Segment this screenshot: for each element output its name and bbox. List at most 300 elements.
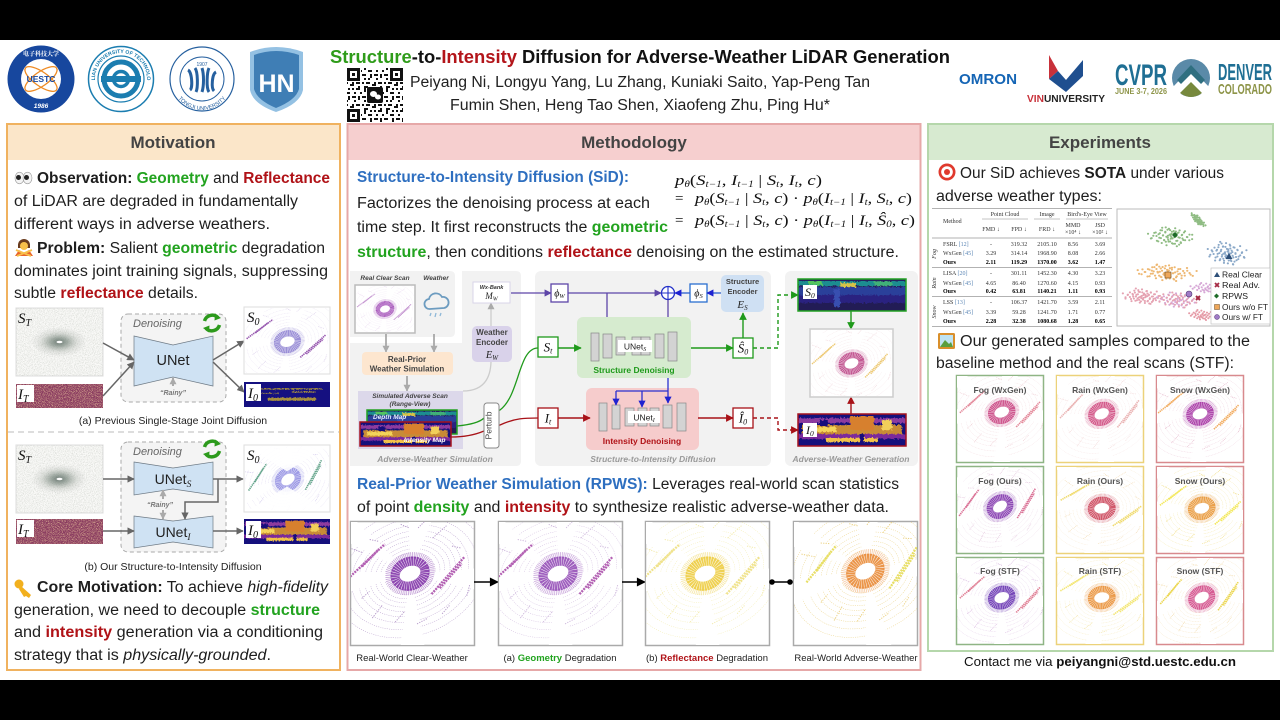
results table: 8.08	[1068, 251, 1078, 257]
generated I_0: 0	[810, 429, 814, 438]
UNet_S: S	[187, 480, 192, 490]
phi_W	[551, 284, 568, 302]
results table: Fog	[932, 249, 938, 260]
equation: =	[675, 213, 683, 229]
section: structure-to-intensity diffusion	[535, 271, 771, 466]
weather encoder: Weather	[476, 328, 508, 337]
results table: Point Cloud	[991, 212, 1019, 218]
results table: 1140.21	[1037, 289, 1057, 295]
icon: framed picture	[938, 333, 955, 349]
heading: experiments: Experiments	[1049, 133, 1151, 152]
structure encoder: Encoder	[727, 287, 758, 296]
equation: ,	[868, 191, 877, 207]
equation: (	[818, 213, 824, 229]
UNet_I: I	[186, 533, 191, 543]
section: structure-to-intensity diffusion: Structure-to-Intensity Diffusion	[590, 454, 716, 464]
equation: θ	[813, 197, 819, 207]
generated S_0: 0	[811, 291, 815, 300]
section: adverse-weather simulation: Adverse-Weather Simulation	[376, 454, 493, 464]
text block: observation and problem: Problem: Salient geometric degradation	[37, 240, 325, 257]
equation: ,	[765, 213, 774, 229]
structure denoising	[577, 317, 691, 378]
text block: SiD description: structure, then conditions reflectance denoising on the estimated structure.	[357, 244, 899, 261]
t-SNE scatter plot	[1117, 209, 1270, 326]
results table: 3.23	[1095, 271, 1105, 277]
equation: S	[696, 173, 722, 189]
icon: weather cloud: Weather	[423, 275, 449, 282]
wx-bank: M	[485, 291, 493, 301]
phi_W: ϕ	[554, 288, 559, 300]
sample: Rain (STF): Rain (STF)	[1079, 566, 1121, 576]
text block: SiD description: Structure-to-Intensity Diffusion (SiD):	[357, 169, 629, 186]
results table: 63.81	[1012, 289, 1026, 295]
heading: motivation: Motivation	[130, 133, 216, 152]
contact line: Contact me via peiyangni@std.uestc.edu.cn	[964, 654, 1236, 669]
results table: 1968.90	[1037, 251, 1057, 257]
icon: weather cloud	[423, 275, 449, 317]
equation: ,	[892, 213, 901, 229]
sample: Fog (WxGen)	[931, 342, 1072, 483]
perturb: Perturb	[484, 411, 494, 439]
S_T noisy point cloud: T	[26, 455, 32, 466]
results table: 1270.60	[1037, 281, 1057, 287]
section: adverse-weather simulation	[350, 271, 521, 466]
arrows	[103, 479, 243, 531]
I_T noisy range image	[16, 384, 103, 408]
results table: 2.28	[986, 319, 996, 325]
text block: observation and problem	[14, 170, 330, 302]
text block: samples intro: baseline method and the real scans (STF):	[936, 355, 1234, 372]
sample: Fog (Ours): Fog (Ours)	[978, 476, 1022, 486]
results table: FSRL [12]	[943, 242, 969, 248]
results table: 3.69	[1095, 242, 1105, 248]
results table: 1.11	[1068, 289, 1078, 295]
intensity denoising: UNet	[633, 412, 653, 422]
scan: geometry degradation: (a) Geometry Degradation	[503, 653, 617, 664]
sample: Fog (STF): Fog (STF)	[980, 566, 1020, 576]
S_0 output: 0	[254, 455, 260, 466]
results table: 1421.70	[1037, 300, 1057, 306]
equation: θ	[684, 179, 691, 189]
rainy condition	[147, 490, 174, 519]
real clear scan	[340, 264, 430, 354]
results table: 0.77	[1095, 310, 1105, 316]
icon: recycle	[203, 314, 221, 332]
equation: Ŝ	[877, 212, 892, 229]
arrow	[474, 581, 498, 583]
text block: observation and problem: of LiDAR are degraded in fundamentally	[14, 193, 298, 210]
results table: Rain	[932, 277, 938, 290]
intensity denoising: Intensity Denoising	[603, 436, 681, 446]
intensity denoising: I	[652, 418, 656, 424]
panel: methodology	[308, 124, 973, 679]
sample: Fog (WxGen): Fog (WxGen)	[974, 385, 1027, 395]
equation: c)	[898, 191, 911, 207]
diagram: previous single-stage joint diffusion	[16, 276, 353, 427]
I_T noisy range image: T	[23, 529, 30, 540]
sample: Snow (STF)	[1127, 523, 1276, 672]
text block: observation and problem: different ways in adverse weathers.	[14, 216, 270, 233]
text block: SOTA claim: adverse weather types:	[936, 188, 1102, 205]
structure denoising: Structure Denoising	[593, 365, 675, 375]
equation: S	[715, 191, 740, 207]
logo: CVPR Denver Colorado: CVPR	[1115, 59, 1167, 92]
results table: 3.62	[1068, 260, 1078, 266]
QR code	[347, 68, 403, 122]
results table: Ours	[943, 319, 957, 325]
equation: t−1	[725, 197, 740, 207]
text block: core motivation	[14, 579, 329, 664]
results table: 0.93	[1095, 289, 1105, 295]
equation: |	[846, 213, 859, 229]
I_0 output: I	[248, 386, 253, 402]
blue conditioning arrows	[616, 378, 668, 407]
icon: target	[938, 164, 956, 180]
UNet_S: UNet	[155, 471, 187, 487]
scan: real-world adverse-weather: Real-World Adverse-Weather	[794, 653, 918, 664]
equation: θ	[704, 197, 710, 207]
equation: t−1	[737, 179, 754, 189]
results table: 32.38	[1012, 319, 1026, 325]
equation: t	[865, 197, 868, 207]
sample grid	[924, 341, 1276, 672]
structure encoder	[721, 275, 764, 312]
UNet_I	[134, 516, 213, 548]
S_T noisy point cloud	[16, 308, 103, 376]
I_t: I	[545, 410, 549, 426]
equation: θ	[813, 219, 819, 229]
equation: t	[795, 179, 799, 189]
equation: I	[730, 173, 754, 189]
simulated adverse scan: Simulated Adverse Scan	[372, 393, 448, 400]
sample: Rain (Ours)	[1040, 446, 1164, 570]
authors: Fumin Shen, Heng Tao Shen, Xiaofeng Zhu, Ping Hu*	[450, 97, 830, 114]
equation: c)	[901, 213, 914, 229]
S_T noisy point cloud: S	[18, 448, 26, 464]
logo: Tongji University	[169, 46, 235, 112]
results table: MMD	[1065, 223, 1081, 229]
equation: p	[694, 191, 710, 207]
results table: FMD ↓	[982, 227, 1000, 233]
results table: LISA [20]	[943, 271, 968, 277]
results table: -	[990, 300, 992, 306]
results table: -	[990, 271, 992, 277]
results table: -	[990, 242, 992, 248]
results table: 1080.68	[1037, 319, 1057, 325]
I_T noisy range image: I	[18, 522, 23, 538]
UNet: UNet	[156, 353, 190, 369]
legend: Ours w/o FT	[1222, 303, 1268, 312]
text block: SOTA claim: Our SiD achieves SOTA under various	[960, 165, 1224, 182]
icon: recycle	[203, 440, 221, 458]
sample: Rain (Ours): Rain (Ours)	[1077, 476, 1123, 486]
S_0 output: S	[247, 448, 254, 464]
denoising box	[121, 314, 226, 402]
results table: 0.42	[986, 289, 996, 295]
rainy condition: “Rainy”	[160, 390, 187, 397]
equation: t−1	[705, 179, 722, 189]
results table: 119.29	[1011, 260, 1027, 266]
logo: CVPR Denver Colorado	[1115, 59, 1272, 98]
equation: 0	[886, 219, 892, 229]
UNet	[134, 336, 213, 386]
equation: ,	[798, 173, 807, 189]
section: adverse-weather generation: Adverse-Weather Generation	[792, 454, 910, 464]
denoising box: Denoising	[133, 446, 183, 458]
text block: SiD description	[357, 169, 899, 261]
I_0 hat: Î	[739, 410, 743, 426]
sample: Snow (STF): Snow (STF)	[1177, 566, 1224, 576]
scan: real-world adverse-weather	[758, 464, 973, 679]
perturb	[484, 403, 499, 448]
results table: Ours	[943, 260, 957, 266]
purple conditioning arrows	[511, 293, 668, 337]
text block: samples intro: Our generated samples compared to the	[960, 333, 1250, 350]
section: adverse-weather generation	[785, 271, 918, 466]
text block: SiD description: Factorizes the denoising process at each	[357, 195, 650, 212]
weather encoder: E	[486, 350, 492, 361]
equation: I	[858, 213, 869, 229]
legend: Ours w/ FT	[1222, 313, 1263, 322]
equation: |	[740, 191, 753, 207]
equation: t	[886, 197, 889, 207]
equation: t−1	[830, 219, 846, 229]
text block: observation and problem: subtle reflectance details.	[14, 285, 198, 302]
results table: 106.37	[1011, 300, 1027, 306]
S_0 hat: 0	[744, 348, 748, 356]
results table: JSD	[1095, 223, 1106, 229]
heading: methodology: Methodology	[581, 133, 687, 152]
real-prior weather simulation box	[362, 352, 453, 375]
equation: t	[776, 179, 780, 189]
gray arrows	[386, 334, 434, 391]
equation: I	[857, 191, 868, 207]
results table: 4.65	[986, 281, 996, 287]
text block: SiD description: time step. It first reconstructs the geometric	[357, 219, 668, 236]
real-prior weather simulation box: Weather Simulation	[370, 364, 444, 374]
I_0 output: 0	[253, 530, 258, 541]
S_t	[538, 337, 558, 357]
I_t: t	[549, 418, 552, 426]
equation: ,	[779, 173, 789, 189]
results table: 314.14	[1011, 251, 1027, 257]
text block: RPWS description	[357, 476, 899, 516]
equation: c) · p	[774, 213, 811, 229]
legend: Real Clear	[1222, 270, 1262, 280]
equation: S	[753, 191, 766, 207]
phi_S: ϕ	[694, 288, 699, 300]
phi_S: S	[699, 293, 703, 300]
results table: 4.15	[1068, 281, 1078, 287]
generated I_0	[798, 414, 906, 446]
equation: S	[716, 213, 740, 229]
equation: p	[694, 213, 710, 229]
results table: Bird's-Eye View	[1067, 212, 1107, 218]
scan: real-world clear-weather: Real-World Clear-Weather	[356, 653, 468, 664]
logo: VinUniversity	[1027, 55, 1105, 105]
generated S_0	[798, 279, 906, 311]
equation: |	[846, 191, 859, 207]
curves to S_t and I_t	[451, 303, 538, 437]
logo: Hainan University shield: HN	[258, 70, 295, 98]
structure encoder: Structure	[726, 277, 759, 286]
I_0 output: 0	[253, 393, 258, 404]
sample: Snow (Ours)	[1134, 441, 1269, 576]
structure encoder: S	[744, 304, 748, 312]
equation: S	[877, 191, 889, 207]
structure denoising: S	[643, 347, 646, 353]
real clear scan: Real Clear Scan	[360, 275, 410, 282]
weather encoder: W	[492, 354, 499, 362]
logo: OMRON: OMRON	[959, 71, 1017, 88]
results table	[932, 208, 1112, 326]
S_T noisy point cloud	[16, 445, 103, 513]
results table: Snow	[932, 305, 938, 319]
results table: FRD ↓	[1039, 227, 1055, 233]
results table: 1.47	[1095, 260, 1105, 266]
simulated adverse scan: (Range-View)	[390, 401, 430, 408]
structure encoder: E	[737, 299, 744, 311]
S_0 output	[222, 276, 353, 408]
S_t: t	[550, 346, 553, 356]
rainy condition: “Rainy”	[147, 502, 174, 509]
panel: experiments	[924, 124, 1276, 672]
results table: 59.28	[1012, 310, 1026, 316]
S_0 output	[213, 405, 363, 554]
text block: core motivation: Core Motivation: To achieve high-fidelity	[37, 579, 329, 596]
wx-bank: W	[493, 296, 499, 302]
sample: Rain (STF)	[1038, 534, 1165, 661]
equation: p	[674, 173, 691, 189]
green and red flow arrows	[558, 295, 851, 430]
results table: 1.71	[1068, 310, 1078, 316]
logo: Dalian University of Technology	[88, 46, 154, 112]
results table: 3.29	[986, 251, 996, 257]
results table: 2.66	[1095, 251, 1105, 257]
S_T noisy point cloud: T	[26, 318, 32, 329]
generated I_0: I	[806, 423, 810, 437]
results table: 2.11	[986, 260, 996, 266]
equation: (	[690, 173, 696, 189]
text block: observation and problem: Observation: Geometry and Reflectance	[37, 170, 330, 187]
results table: 4.30	[1068, 271, 1078, 277]
equation: ,	[889, 191, 898, 207]
simulated adverse scan	[358, 391, 463, 449]
sample: Rain (WxGen)	[1029, 341, 1175, 487]
logo: Hainan University shield	[250, 47, 303, 112]
panel: motivation	[7, 124, 363, 670]
results table: 1241.70	[1037, 310, 1057, 316]
S_0 output: S	[247, 310, 254, 326]
generated S_0: S	[805, 285, 811, 299]
text block: observation and problem: dominates joint training signals, suppressing	[14, 263, 328, 280]
denoising box: Denoising	[133, 318, 183, 330]
logo: UESTC	[8, 46, 74, 112]
equation: =	[675, 191, 683, 207]
logo: Tongji University: TONGJI UNIVERSITY	[179, 96, 225, 110]
scan: real-world clear-weather	[308, 471, 513, 676]
header band: logos, title, authors	[8, 46, 1272, 122]
I_T noisy range image: I	[18, 387, 23, 403]
S_T noisy point cloud: S	[18, 311, 26, 327]
results table: 1370.00	[1037, 260, 1057, 266]
sample: Fog (STF)	[931, 527, 1072, 668]
legend	[1211, 268, 1270, 324]
equation: t	[762, 197, 766, 207]
S_0 hat: Ŝ	[738, 340, 744, 356]
logo: UESTC: 电子科技大学	[23, 49, 59, 58]
sample: Rain (WxGen): Rain (WxGen)	[1072, 385, 1128, 395]
denoising box	[121, 442, 226, 552]
phi_S	[690, 284, 707, 302]
scan: geometry degradation	[456, 471, 661, 676]
results table: WxGen [45]	[943, 281, 973, 287]
equation: t−1	[830, 197, 846, 207]
results table: WxGen [45]	[943, 310, 973, 316]
equation: ,	[722, 173, 731, 189]
rainy condition	[160, 378, 187, 397]
caption a: (a) Previous Single-Stage Joint Diffusion	[79, 415, 267, 427]
wx-bank	[473, 282, 510, 303]
equation: c)	[807, 173, 821, 189]
I_0 output: I	[248, 523, 253, 539]
icon: key	[14, 580, 31, 598]
results table: LSS [13]	[943, 300, 965, 306]
sample: Snow (Ours): Snow (Ours)	[1175, 476, 1225, 486]
authors	[410, 74, 870, 114]
legend: Real Adv.	[1222, 281, 1260, 290]
results table: 2.11	[1095, 300, 1105, 306]
text block: RPWS description: of point density and intensity to synthesize realistic adverse-weather data.	[357, 499, 889, 516]
arrows	[103, 341, 244, 396]
text block: core motivation: strategy that is physically-grounded .	[14, 647, 271, 664]
logo: Tongji University: 1907	[196, 62, 208, 68]
results table: Ours	[943, 289, 957, 295]
results table: 1.28	[1068, 319, 1078, 325]
equation: S	[767, 173, 780, 189]
results table: Image	[1040, 212, 1055, 218]
results table: WxGen [45]	[943, 251, 973, 257]
I_0 output	[244, 382, 330, 407]
connector	[769, 579, 793, 585]
real-prior weather simulation box: Real-Prior	[388, 355, 426, 364]
equation: I	[787, 173, 799, 189]
equation: t−1	[725, 219, 740, 229]
adder	[662, 286, 674, 300]
equation	[674, 173, 915, 229]
equation: t	[762, 219, 766, 229]
intensity denoising	[586, 388, 699, 450]
sample: Fog (Ours)	[924, 431, 1076, 582]
generated point cloud	[785, 297, 918, 430]
results table: 1452.30	[1037, 271, 1057, 277]
icon: eyes	[15, 172, 32, 184]
equation: ,	[765, 191, 774, 207]
I_t	[538, 408, 558, 428]
equation: I	[823, 213, 846, 229]
text block: core motivation: generation, we need to decouple structure	[14, 602, 320, 619]
I_0 output	[244, 519, 330, 544]
results table: 301.11	[1011, 271, 1027, 277]
weather encoder: Encoder	[476, 338, 508, 347]
equation: (	[818, 191, 824, 207]
arrow	[622, 581, 645, 583]
results table: 0.65	[1095, 319, 1105, 325]
equation: θ	[704, 219, 710, 229]
S_t: S	[544, 340, 550, 354]
text block: samples intro	[936, 333, 1250, 372]
legend: RPWS	[1222, 292, 1248, 301]
